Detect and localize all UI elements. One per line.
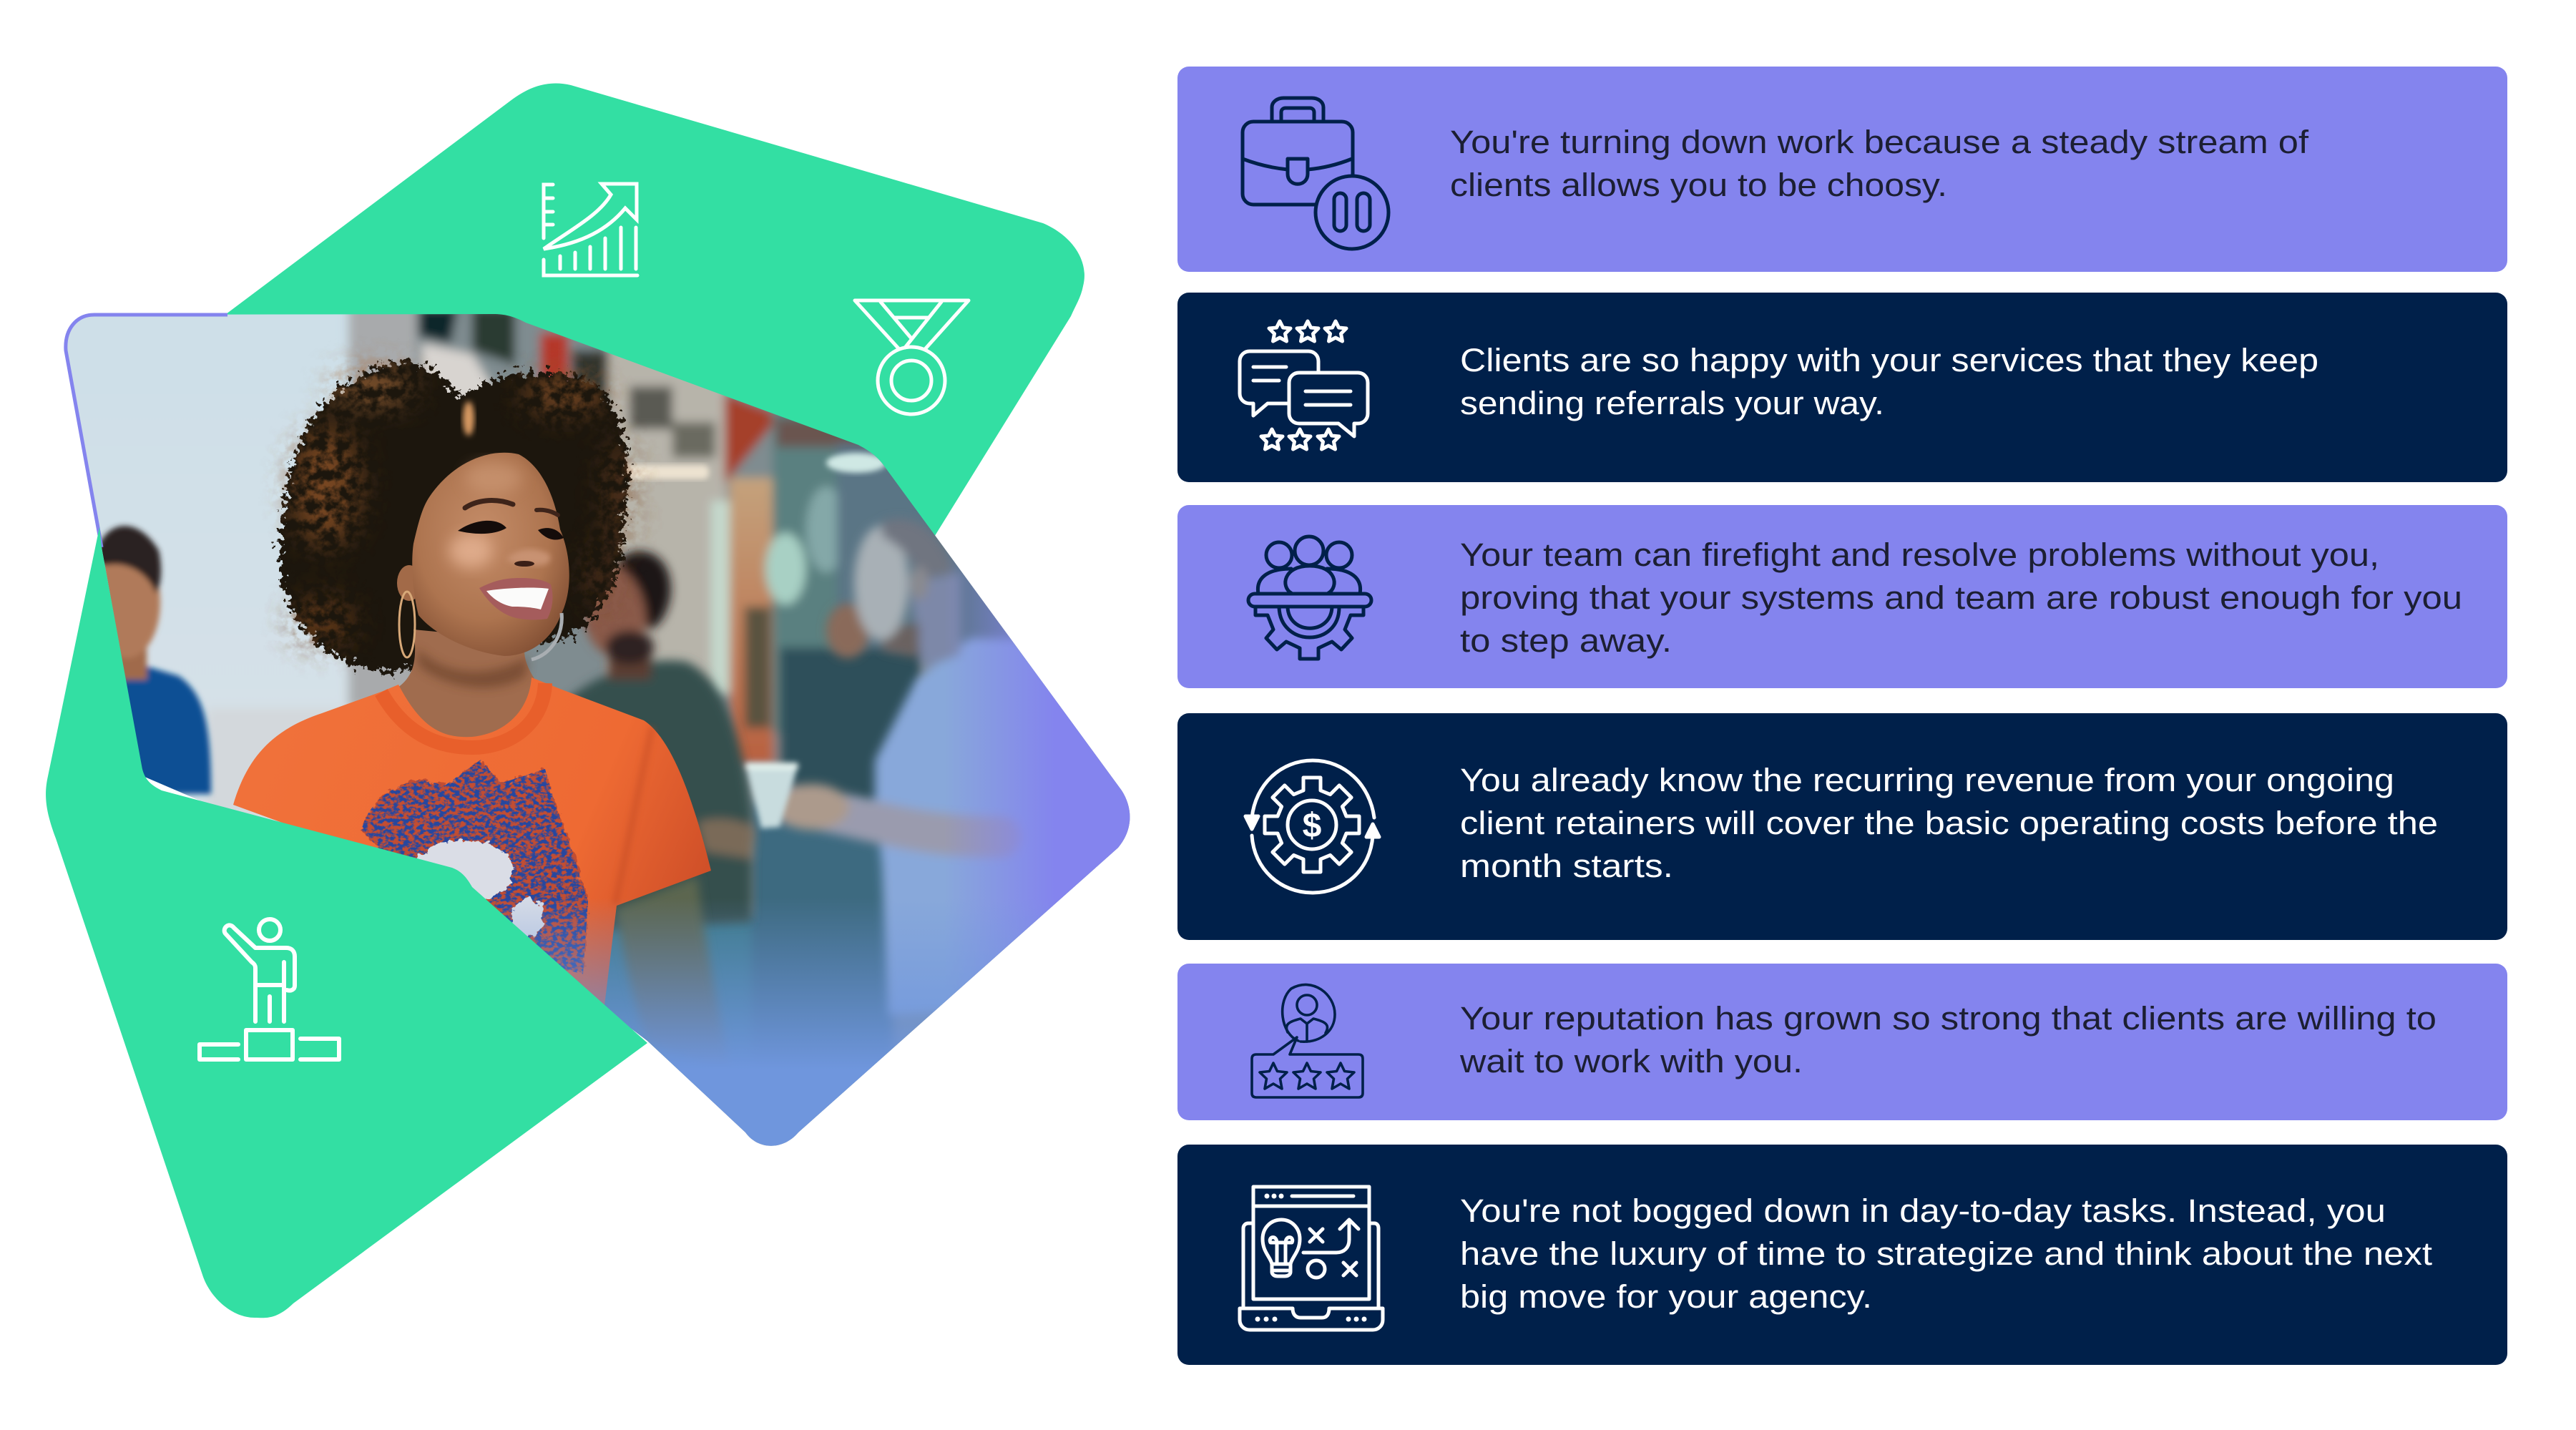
- left eyebrow: [465, 501, 513, 508]
- neck shadow: [416, 647, 528, 687]
- right eye: [538, 528, 564, 540]
- icon: growth chart: [544, 184, 637, 275]
- man at right with cup: [779, 518, 1109, 1017]
- hair light spot: [463, 401, 474, 436]
- text: client retainers will cover the basic operating costs before the: [1460, 805, 2438, 841]
- photo purple outline: [66, 315, 227, 547]
- man at left: [94, 526, 211, 794]
- shirt graphic: [361, 760, 588, 974]
- icon: laptop dots: [1255, 1193, 1366, 1322]
- icon: review bubbles and stars: [1240, 321, 1368, 449]
- text: month starts.: [1460, 848, 1673, 884]
- panel: referrals: [1177, 293, 2507, 482]
- text: sending referrals your way.: [1460, 385, 1884, 421]
- text: Your team can firefight and resolve problems without you,: [1460, 537, 2379, 573]
- green shape: lower left: [46, 527, 647, 1318]
- icon: person on podium: [200, 919, 339, 1059]
- text: You're not bogged down in day-to-day tasks. Instead, you: [1460, 1193, 2386, 1229]
- forehead highlight: [465, 462, 522, 494]
- icon: medal: [855, 300, 969, 414]
- wall light bar: [622, 465, 709, 479]
- cheek highlight: [449, 534, 492, 568]
- woman's neck: [393, 630, 535, 744]
- icon: dollar sign: $: [1303, 807, 1322, 845]
- panel: time to strategize: [1177, 1145, 2507, 1365]
- text: big move for your agency.: [1460, 1278, 1872, 1315]
- shirt collar: [381, 683, 545, 748]
- smile: [479, 578, 552, 619]
- man in background: [565, 551, 755, 930]
- woman's shirt: [233, 677, 711, 1023]
- text: Your reputation has grown so strong that clients are willing to: [1460, 1000, 2437, 1037]
- text: have the luxury of time to strategize and think about the next: [1460, 1235, 2433, 1272]
- green shape: top: [226, 83, 1084, 572]
- coffee cup: [745, 763, 798, 828]
- woman's hair: [280, 362, 628, 671]
- left eye: [458, 521, 506, 534]
- icon: reputation rating: [1252, 984, 1363, 1097]
- panel: turning down work: [1177, 67, 2507, 272]
- nose: [506, 549, 550, 565]
- left hoop earring: [399, 592, 415, 657]
- panel: recurring revenue: [1177, 713, 2507, 940]
- hair highlights: [290, 368, 631, 647]
- icon: team on gear: [1248, 537, 1371, 659]
- lamp: [826, 453, 886, 473]
- right hoop earring: [532, 613, 562, 660]
- icon: gear with dollar and cycle arrows: [1245, 760, 1379, 893]
- icon: briefcase with pause: [1243, 98, 1389, 249]
- panel: strong reputation: [1177, 964, 2507, 1120]
- woman's face: [412, 453, 569, 656]
- text: You already know the recurring revenue from your ongoing: [1460, 762, 2394, 798]
- woman's ear: [397, 565, 421, 601]
- text: to step away.: [1460, 622, 1672, 659]
- right eyebrow: [537, 510, 558, 515]
- panel: team resolves problems: [1177, 505, 2507, 688]
- purple fade: [930, 308, 1159, 1166]
- nostril: [514, 561, 534, 567]
- text: clients allows you to be choosy.: [1450, 167, 1947, 203]
- blue fade: [501, 880, 1159, 1166]
- sleeve seam: [615, 727, 652, 904]
- text: wait to work with you.: [1459, 1043, 1803, 1079]
- text: Clients are so happy with your services that they keep: [1460, 342, 2318, 378]
- text: You're turning down work because a steady stream of: [1450, 124, 2309, 160]
- photo: smiling woman with team: [50, 300, 1159, 1166]
- icon: laptop with strategy: [1240, 1187, 1383, 1330]
- woman's arm: [614, 876, 721, 1052]
- text: proving that your systems and team are robust enough for you: [1460, 579, 2462, 616]
- photo background wall: [50, 300, 1159, 1159]
